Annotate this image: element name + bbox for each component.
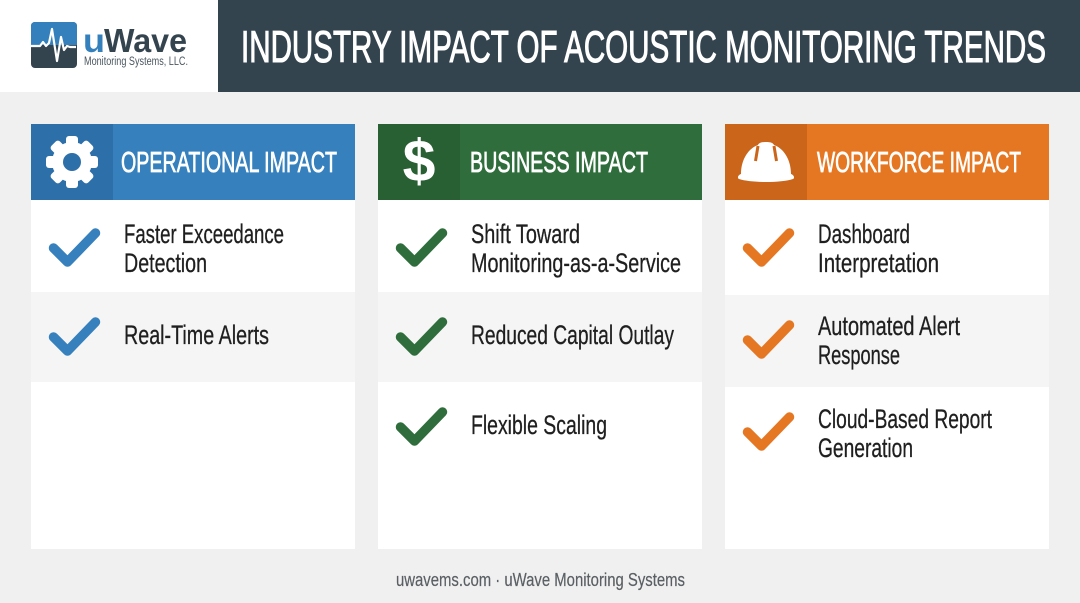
icon: hard hat xyxy=(738,142,794,182)
row: flexible scaling xyxy=(378,382,702,549)
item text: Dashboard xyxy=(818,219,910,249)
logo panel xyxy=(0,0,218,92)
item text: Generation xyxy=(818,433,913,463)
business header xyxy=(378,124,702,200)
icon: check xyxy=(748,233,790,262)
panel: operational impact xyxy=(31,124,355,549)
workforce header xyxy=(725,124,1049,200)
item text: Flexible Scaling xyxy=(471,410,607,440)
icon: check xyxy=(748,325,790,354)
icon: check xyxy=(400,233,442,262)
icon: waveform logo mark xyxy=(31,22,77,68)
row: reduced capital outlay xyxy=(378,292,702,382)
operational header xyxy=(31,124,355,200)
logo wordmark: u xyxy=(83,22,105,59)
operational heading: OPERATIONAL IMPACT xyxy=(121,147,337,179)
icon: dollar: $ xyxy=(403,128,435,194)
icon: check xyxy=(54,322,96,351)
item text: Real-Time Alerts xyxy=(124,320,269,350)
title banner xyxy=(218,0,1080,92)
item text: Detection xyxy=(124,248,207,278)
row: dashboard interpretation xyxy=(725,200,1049,295)
item text: Faster Exceedance xyxy=(124,219,284,249)
icon: check xyxy=(748,417,790,446)
item text: Monitoring-as-a-Service xyxy=(471,248,681,278)
row: shift toward monitoring-as-a-service xyxy=(378,200,702,292)
item text: Interpretation xyxy=(818,248,939,278)
item text: Reduced Capital Outlay xyxy=(471,320,675,350)
panel: workforce impact xyxy=(725,124,1049,549)
row: cloud-based report generation xyxy=(725,387,1049,549)
row: automated alert response xyxy=(725,295,1049,387)
logo wordmark: Wave xyxy=(104,22,187,59)
icon: check xyxy=(400,412,442,441)
icon: check xyxy=(54,233,96,262)
item text: Response xyxy=(818,340,900,370)
logo wordmark xyxy=(83,22,188,68)
item text: Automated Alert xyxy=(818,311,960,341)
footer: uwavems.com · uWave Monitoring Systems xyxy=(396,569,685,590)
icon: check xyxy=(400,322,442,351)
item text: Cloud-Based Report xyxy=(818,404,992,434)
icon: gear xyxy=(46,136,98,188)
item text: Shift Toward xyxy=(471,219,580,249)
logo wordmark: Monitoring Systems, LLC. xyxy=(84,56,188,68)
row: real-time alerts xyxy=(31,292,355,382)
panel: business impact xyxy=(378,124,702,549)
row: faster exceedance detection xyxy=(31,200,355,292)
business heading: BUSINESS IMPACT xyxy=(470,147,648,179)
